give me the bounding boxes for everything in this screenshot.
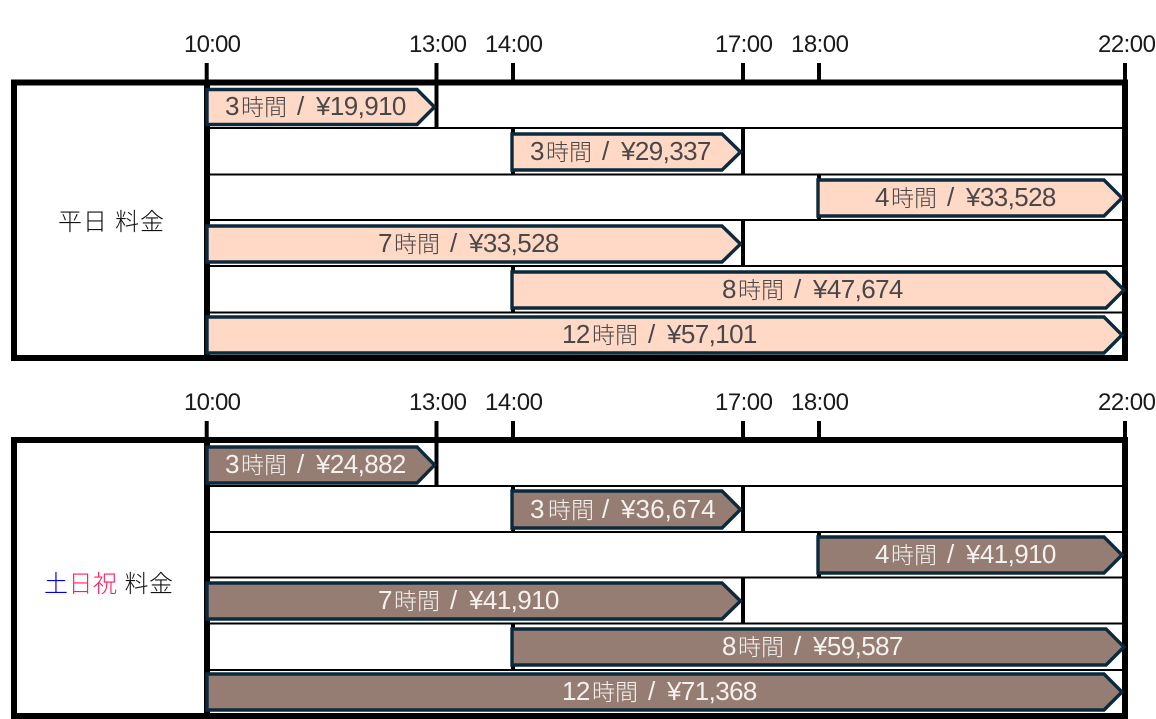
bar: weekday 7 hours 10:00-17:00: /	[450, 228, 463, 258]
time axis labels: weekend	[184, 389, 1156, 416]
time axis labels: weekday: 22:00	[1098, 31, 1156, 58]
bar: weekday 3 hours 14:00-17:00: 時間	[546, 139, 592, 165]
bar: weekday 7 hours 10:00-17:00	[207, 226, 740, 262]
bar: weekday 4 hours 18:00-22:00: /	[947, 182, 960, 212]
bar: weekend 4 hours 18:00-22:00: 4	[875, 539, 889, 569]
bar: weekday 8 hours 14:00-22:00: 時間	[738, 277, 784, 303]
time axis labels: weekend: 14:00	[485, 389, 543, 416]
bar: weekday 12 hours 10:00-22:00: 12	[562, 319, 590, 349]
time axis labels: weekday: 14:00	[485, 31, 543, 58]
bar: weekend 12 hours 10:00-22:00: ¥71,368	[666, 676, 757, 706]
row label: weekday pricing: 平日 料金	[58, 209, 164, 236]
bar: weekend 3 hours 10:00-13:00: /	[297, 449, 310, 479]
time axis labels: weekend: 10:00	[184, 389, 241, 416]
grid: weekday frame, rows and time ticks	[14, 63, 1125, 358]
time axis labels: weekend: 17:00	[715, 389, 773, 416]
row label: weekend and holiday pricing: 土日祝 料金	[44, 571, 173, 598]
bar: weekend 4 hours 18:00-22:00: ¥41,910	[965, 539, 1056, 569]
time axis labels: weekday: 17:00	[715, 31, 773, 58]
bar: weekend 3 hours 10:00-13:00: ¥24,882	[315, 449, 406, 479]
bar: weekend 7 hours 10:00-17:00	[207, 583, 740, 619]
panel: weekend and holiday pricing	[14, 389, 1156, 716]
bar: weekday 7 hours 10:00-17:00: 時間	[394, 231, 440, 257]
bar: weekend 8 hours 14:00-22:00: ¥59,587	[812, 631, 903, 661]
bar: weekend 3 hours 14:00-17:00: 時間	[548, 497, 594, 523]
bar: weekday 8 hours 14:00-22:00: /	[794, 274, 807, 304]
bar: weekend 12 hours 10:00-22:00: /	[648, 676, 661, 706]
bar: weekend 3 hours 10:00-13:00	[207, 447, 434, 483]
bar: weekend 8 hours 14:00-22:00	[512, 629, 1124, 665]
bar: weekday 8 hours 14:00-22:00	[512, 272, 1124, 308]
bar: weekday 4 hours 18:00-22:00	[818, 180, 1122, 216]
bar: weekday 4 hours 18:00-22:00: 時間	[891, 185, 937, 211]
bar: weekend 8 hours 14:00-22:00: 8	[722, 631, 736, 661]
bar: weekend 7 hours 10:00-17:00: /	[450, 585, 463, 615]
bar: weekday 4 hours 18:00-22:00: 4	[875, 182, 889, 212]
bar: weekday 3 hours 14:00-17:00: 3	[530, 136, 544, 166]
time axis labels: weekday: 10:00	[184, 31, 241, 58]
time axis labels: weekday: 18:00	[791, 31, 849, 58]
bar: weekend 3 hours 14:00-17:00	[512, 491, 740, 528]
time axis labels: weekend: 18:00	[791, 389, 849, 416]
bar: weekend 3 hours 14:00-17:00: 3	[530, 494, 544, 524]
bar: weekday 12 hours 10:00-22:00	[207, 317, 1122, 353]
bar: weekend 8 hours 14:00-22:00: 時間	[738, 634, 784, 660]
bar: weekday 3 hours 14:00-17:00	[512, 134, 740, 170]
bar: weekday 8 hours 14:00-22:00: ¥47,674	[812, 274, 903, 304]
grid: weekend frame, rows and time ticks	[14, 421, 1125, 716]
bar: weekday 7 hours 10:00-17:00: 7	[378, 228, 392, 258]
bar: weekend 3 hours 14:00-17:00: /	[602, 494, 615, 524]
bar: weekday 12 hours 10:00-22:00: ¥57,101	[666, 319, 757, 349]
bar: weekend 12 hours 10:00-22:00: 12	[562, 676, 590, 706]
bar: weekday 3 hours 10:00-13:00	[207, 90, 434, 124]
bar: weekend 3 hours 10:00-13:00: 時間	[241, 452, 287, 478]
bar: weekend 7 hours 10:00-17:00: ¥41,910	[468, 585, 559, 615]
bar: weekend 7 hours 10:00-17:00: 7	[378, 585, 392, 615]
panel: weekday pricing	[14, 31, 1156, 358]
bar: weekday 12 hours 10:00-22:00: /	[648, 319, 661, 349]
bar: weekday 4 hours 18:00-22:00: ¥33,528	[965, 182, 1056, 212]
bar: weekend 3 hours 14:00-17:00: ¥36,674	[620, 494, 716, 524]
time axis labels: weekend: 13:00	[409, 389, 467, 416]
bar: weekend 3 hours 10:00-13:00: 3	[225, 449, 239, 479]
bar: weekday 3 hours 10:00-13:00: 時間	[241, 94, 287, 120]
time axis labels: weekday: 13:00	[409, 31, 467, 58]
bar: weekend 8 hours 14:00-22:00: /	[794, 631, 807, 661]
bar: weekday 3 hours 14:00-17:00: /	[602, 136, 615, 166]
bar: weekday 8 hours 14:00-22:00: 8	[722, 274, 736, 304]
bar: weekend 4 hours 18:00-22:00: /	[947, 539, 960, 569]
bar: weekend 4 hours 18:00-22:00	[818, 537, 1122, 573]
bar: weekday 3 hours 10:00-13:00: 3	[225, 91, 239, 121]
bar: weekday 3 hours 10:00-13:00: /	[297, 91, 310, 121]
bar: weekend 12 hours 10:00-22:00: 時間	[592, 679, 638, 705]
bar: weekday 7 hours 10:00-17:00: ¥33,528	[468, 228, 559, 258]
bar: weekend 4 hours 18:00-22:00: 時間	[891, 542, 937, 568]
bar: weekday 3 hours 10:00-13:00: ¥19,910	[315, 91, 406, 121]
bar: weekday 12 hours 10:00-22:00: 時間	[592, 322, 638, 348]
time axis labels: weekend: 22:00	[1098, 389, 1156, 416]
bar: weekend 7 hours 10:00-17:00: 時間	[394, 588, 440, 614]
bar: weekday 3 hours 14:00-17:00: ¥29,337	[620, 136, 711, 166]
bar: weekend 12 hours 10:00-22:00	[207, 674, 1122, 710]
time axis labels: weekday	[184, 31, 1156, 58]
